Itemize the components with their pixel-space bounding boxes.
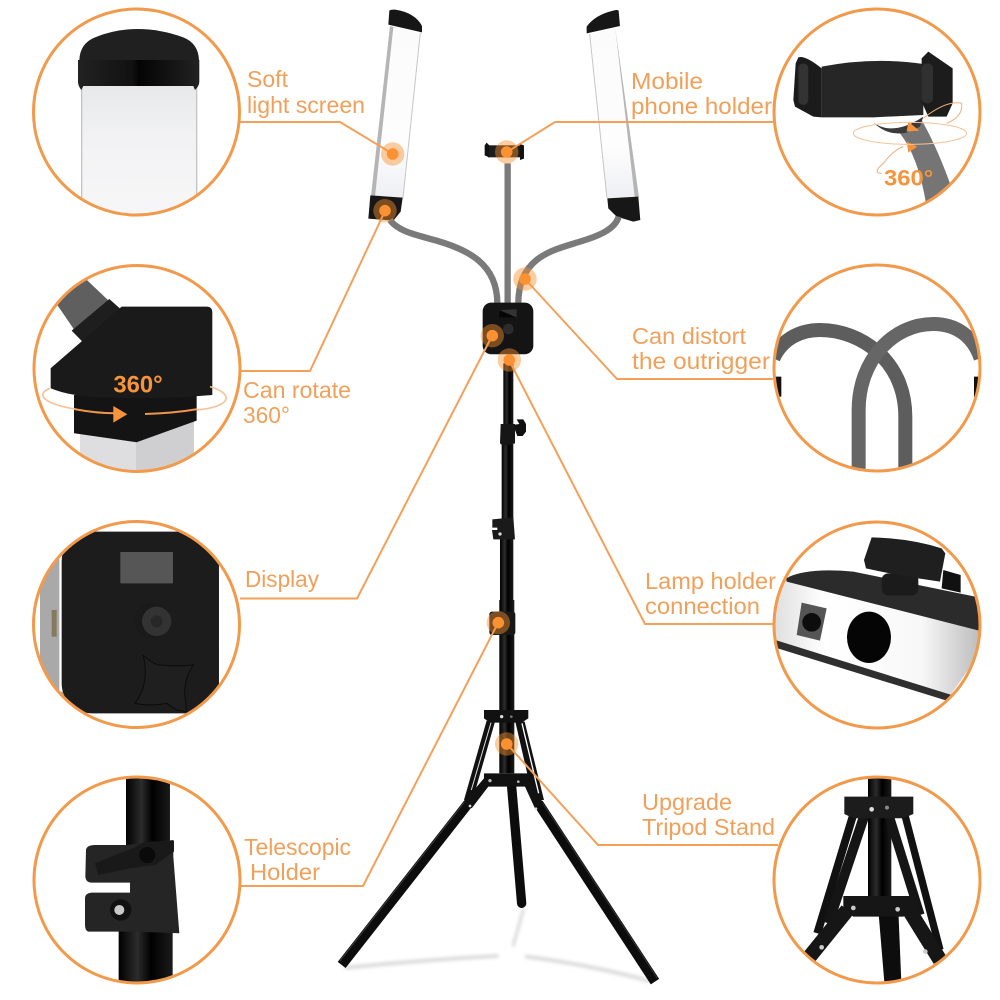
leader line: can rotate (241, 211, 385, 371)
circle: phone holder detail (774, 9, 980, 215)
circle: tripod stand detail (774, 777, 980, 990)
label: can distort the outrigger: Can distort (632, 323, 747, 349)
leader line: tripod stand (507, 744, 778, 845)
marker: telescopic holder (487, 611, 510, 634)
marker: lamp holder (498, 348, 521, 372)
label: soft light screen: light screen (247, 92, 365, 118)
circle: phone holder detail: 360° (884, 165, 933, 190)
marker: rotating head (373, 199, 397, 222)
label: upgrade tripod stand: Tripod Stand (642, 814, 775, 840)
marker: light screen (381, 142, 404, 166)
marker: tripod (495, 732, 518, 756)
label: mobile phone holder: phone holder (631, 93, 772, 119)
label: can distort the outrigger: the outrigger (632, 348, 770, 374)
leader line: telescopic holder (240, 623, 498, 886)
label: display: Display (245, 566, 319, 592)
main product: tripod base (340, 600, 657, 982)
label: mobile phone holder: Mobile (631, 68, 703, 94)
circle: display detail (34, 522, 240, 728)
circle: rotating head detail (34, 266, 240, 483)
label: can rotate 360: 360° (243, 402, 290, 428)
circle: telescopic holder detail (34, 777, 240, 987)
label: soft light screen: Soft (247, 66, 289, 92)
leader line: mobile phone holder (507, 122, 773, 152)
label: telescopic holder: Telescopic (244, 834, 351, 860)
circle: soft light screen detail (34, 9, 240, 217)
leader line: can distort (525, 279, 773, 379)
circle: lamp holder connection detail (770, 522, 987, 728)
main product: flexible gooseneck arms (390, 163, 619, 303)
main product: left light bar (368, 10, 422, 221)
marker: display (481, 324, 504, 347)
circle: rotating head detail: 360° (113, 372, 163, 399)
leader line: soft light screen (240, 122, 393, 154)
leader line: display (240, 336, 492, 598)
label: lamp holder connection: Lamp holder (645, 568, 776, 594)
marker: phone holder (495, 140, 518, 164)
label: can rotate 360: Can rotate (243, 377, 351, 403)
label: lamp holder connection: connection (645, 593, 760, 619)
label: upgrade tripod stand: Upgrade (642, 789, 732, 815)
marker: gooseneck (513, 267, 537, 291)
label: telescopic holder: Holder (250, 859, 320, 885)
circle: gooseneck detail (773, 265, 982, 473)
leader line: lamp holder connection (509, 360, 773, 624)
main product: right light bar (587, 10, 640, 222)
main product: control box and phone clip (483, 143, 533, 354)
main product: telescopic pole and clamps (489, 363, 526, 635)
main product: stand shadow (347, 910, 648, 981)
